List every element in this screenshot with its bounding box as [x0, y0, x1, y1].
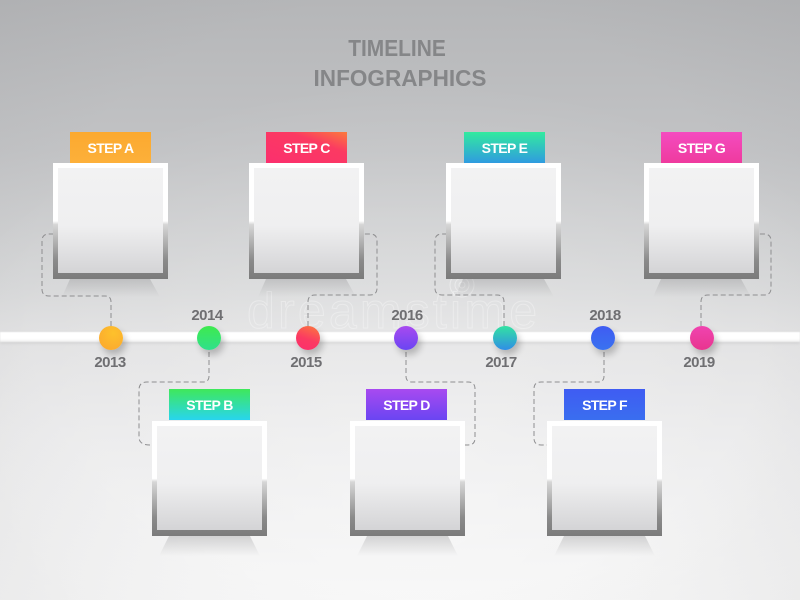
timeline bar	[0, 332, 800, 342]
marker 2013	[99, 326, 123, 350]
year 2016: 2016	[391, 307, 423, 324]
marker 2015	[296, 326, 320, 350]
step A	[53, 132, 168, 279]
step E: STEP E	[482, 140, 527, 156]
year 2015: 2015	[290, 354, 322, 371]
marker 2018	[591, 326, 615, 350]
step B: STEP B	[186, 397, 233, 413]
year 2013: 2013	[94, 354, 126, 371]
watermark: dreamstime	[247, 283, 537, 339]
step E	[446, 132, 561, 279]
marker 2016	[394, 326, 418, 350]
year 2014: 2014	[191, 307, 223, 324]
marker 2017	[493, 326, 517, 350]
step A: STEP A	[88, 140, 133, 156]
marker 2019	[690, 326, 714, 350]
step G: STEP G	[678, 140, 725, 156]
step G	[644, 132, 759, 279]
step D: STEP D	[383, 397, 430, 413]
step F	[547, 389, 662, 536]
step C	[249, 132, 364, 279]
title: TIMELINE	[348, 35, 446, 61]
year 2019: 2019	[683, 354, 715, 371]
title: INFOGRAPHICS	[314, 65, 486, 91]
step B	[152, 389, 267, 536]
step F: STEP F	[582, 397, 627, 413]
step C: STEP C	[283, 140, 330, 156]
year 2017: 2017	[485, 354, 517, 371]
step D	[350, 389, 465, 536]
title	[314, 35, 486, 91]
year 2018: 2018	[589, 307, 621, 324]
marker 2014	[197, 326, 221, 350]
